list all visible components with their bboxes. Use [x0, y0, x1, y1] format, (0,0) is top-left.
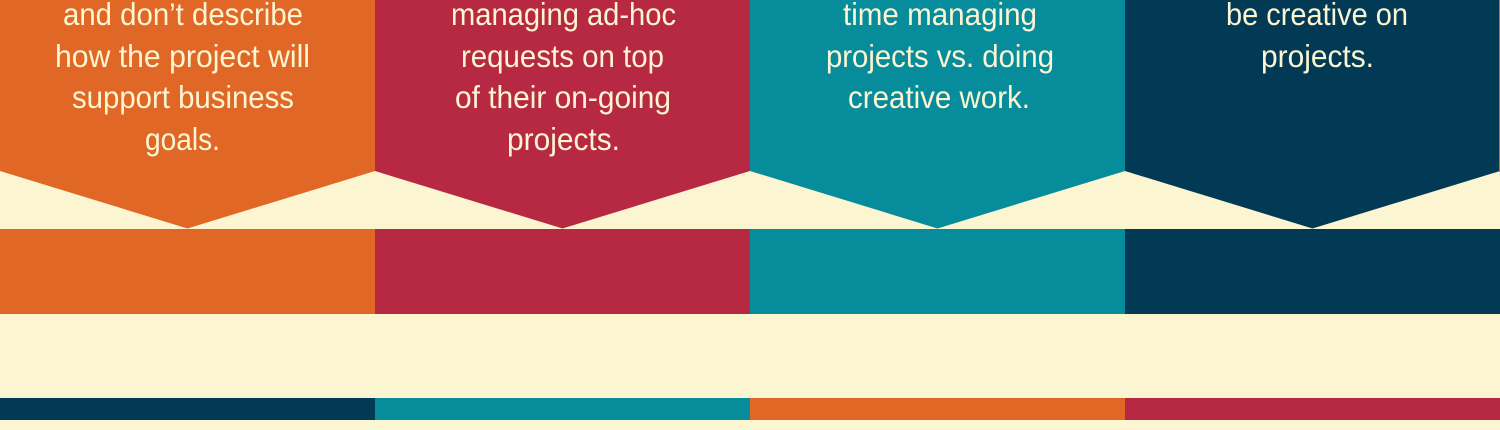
red chevron shape — [375, 0, 750, 228]
teal column text: projects vs. doing — [826, 38, 1054, 74]
navy column text: projects. — [1261, 38, 1374, 74]
red column text: requests on top — [461, 38, 664, 74]
panel: orange chevron column — [0, 0, 375, 228]
panel: teal chevron column — [750, 0, 1125, 228]
navy chevron shape — [1125, 0, 1500, 228]
teal column text — [826, 0, 1054, 115]
orange sliver at right edge — [1499, 0, 1500, 172]
navy column text — [1226, 0, 1408, 74]
orange column text: support business — [72, 79, 294, 115]
red column text: projects. — [507, 121, 620, 157]
red column text: of their on-going — [455, 79, 671, 115]
teal column text: creative work. — [848, 79, 1030, 115]
lower colour band — [0, 398, 1500, 420]
teal chevron shape — [750, 0, 1125, 228]
red column text — [451, 0, 676, 157]
panel: red chevron column — [375, 0, 750, 228]
upper colour band — [0, 229, 1500, 314]
panel: navy chevron column — [1125, 0, 1500, 228]
orange column text: how the project will — [55, 38, 310, 74]
orange chevron shape — [0, 0, 375, 228]
orange column text — [55, 0, 310, 157]
orange column text: goals. — [145, 121, 220, 157]
